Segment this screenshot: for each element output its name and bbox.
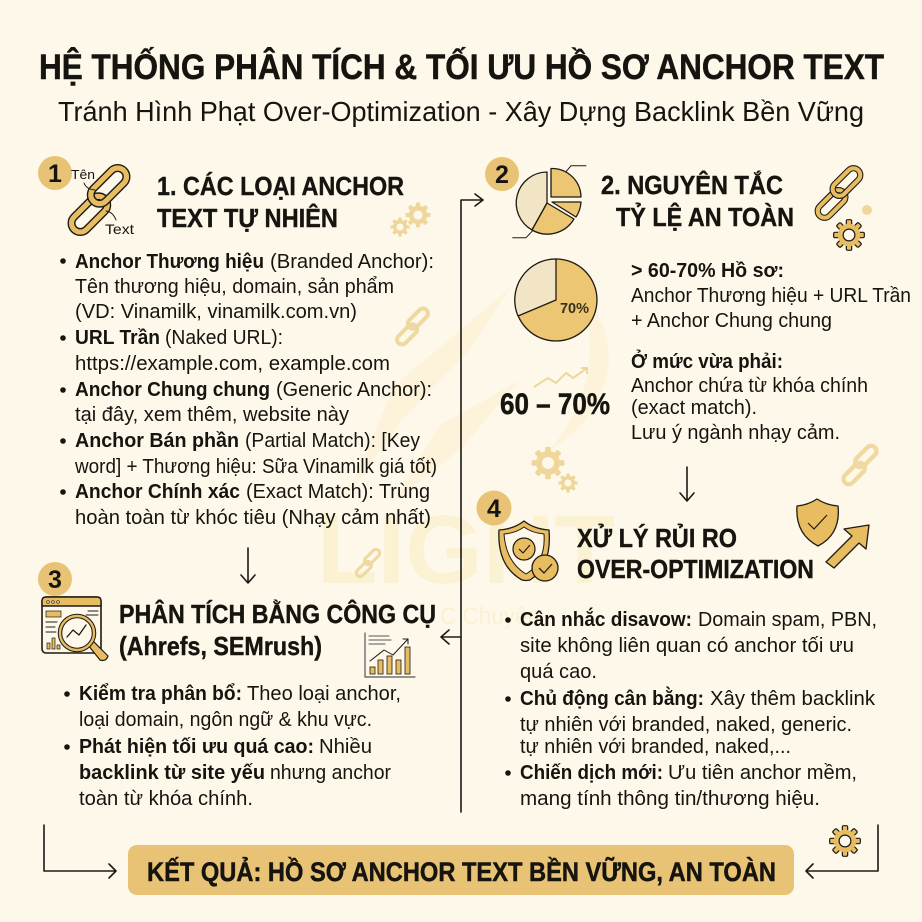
heading 2: 2. NGUYÊN TẮC xyxy=(601,170,783,200)
heading 4 xyxy=(577,522,814,584)
list: tool checks: Theo loại anchor, xyxy=(247,683,401,705)
heading 4: XỬ LÝ RỦI RO xyxy=(577,522,737,553)
icon: chain and gear xyxy=(811,165,872,250)
heading 3: PHÂN TÍCH BẰNG CÔNG CỤ xyxy=(119,599,436,629)
icon: pale chains xyxy=(353,306,881,578)
list: anchor types: https://example.com, example.com xyxy=(75,353,390,375)
badge 1: 1 xyxy=(48,160,62,188)
heading 2 xyxy=(601,170,794,232)
list: risk actions: Xây thêm backlink xyxy=(710,688,876,710)
list: anchor types: tại đây, xem thêm, website này xyxy=(75,404,349,426)
icon: exploded pie xyxy=(513,166,586,238)
result banner: KẾT QUẢ: HỒ SƠ ANCHOR TEXT BỀN VỮNG, AN TOÀN xyxy=(147,855,776,887)
icon: pale gears center xyxy=(532,447,578,493)
list: tool checks: backlink từ site yếu xyxy=(79,762,265,784)
list: risk actions: quá cao. xyxy=(520,661,597,683)
result banner xyxy=(128,845,794,895)
watermark xyxy=(317,288,615,630)
list: anchor types: Anchor Chính xác xyxy=(75,481,240,503)
list: anchor types: hoàn toàn từ khóc tiêu (Nhạy cảm nhất) xyxy=(75,507,431,529)
heading 3: (Ahrefs, SEMrush) xyxy=(119,631,322,661)
connector: central line with arrows xyxy=(441,194,483,812)
text: ratio rules xyxy=(631,260,911,444)
list: anchor types xyxy=(60,251,437,529)
list: risk actions: tự nhiên với branded, naked,... xyxy=(520,736,791,758)
list: anchor types: Anchor Bán phần xyxy=(75,430,239,452)
list: tool checks: Phát hiện tối ưu quá cao: xyxy=(79,736,314,758)
list: anchor types: URL Trần xyxy=(75,327,160,349)
arrow: section 2 to section 4 xyxy=(680,467,694,501)
panel: section 3 tools xyxy=(38,562,436,810)
list: anchor types: Anchor Chung chung xyxy=(75,379,270,401)
heading 3 xyxy=(119,599,436,661)
icon: chain with labels xyxy=(63,164,135,237)
icon: shield with checks xyxy=(499,521,558,581)
list: tool checks: Kiểm tra phân bổ: xyxy=(79,683,242,705)
heading 2: TỶ LỆ AN TOÀN xyxy=(616,202,794,232)
icon: trend arrow xyxy=(534,368,587,387)
text: ratio rules: Ở mức vừa phải: xyxy=(631,349,783,373)
list: tool checks: toàn từ khóa chính. xyxy=(79,788,253,810)
list: anchor types: (VD: Vinamilk, vinamilk.com.vn) xyxy=(75,301,357,323)
chart: 70 percent pie xyxy=(515,259,597,341)
list: risk actions: tự nhiên với branded, naked, generic. xyxy=(520,714,852,736)
chart: 70 percent pie: 70% xyxy=(560,300,589,317)
badge 1 xyxy=(38,156,72,190)
text: ratio rules: Anchor Thương hiệu + URL Trần xyxy=(631,285,911,307)
heading 1 xyxy=(157,171,404,233)
badge 4 xyxy=(476,490,512,526)
icon: bar chart xyxy=(365,633,415,677)
badge 2 xyxy=(485,157,519,191)
list: risk actions: Domain spam, PBN, xyxy=(698,609,877,631)
list: anchor types: (Branded Anchor): xyxy=(270,251,434,273)
badge 2: 2 xyxy=(495,161,509,189)
panel: section 4 risk handling xyxy=(476,490,877,810)
list: risk actions: Chủ động cân bằng: xyxy=(520,686,704,710)
icon: chain with labels: Text xyxy=(105,221,134,237)
list: anchor types: Anchor Thương hiệu xyxy=(75,251,264,273)
text: ratio rules: + Anchor Chung chung xyxy=(631,310,832,332)
list: risk actions: Ưu tiên anchor mềm, xyxy=(668,762,857,784)
list: anchor types: (Generic Anchor): xyxy=(276,379,432,401)
heading 1: TEXT TỰ NHIÊN xyxy=(157,203,338,233)
arrow: bottom left to result xyxy=(44,825,116,878)
list: risk actions xyxy=(505,607,877,810)
list: anchor types: (Partial Match): [Key xyxy=(245,430,420,452)
watermark: LIGHT xyxy=(317,495,615,604)
subtitle: Tránh Hình Phạt Over-Optimization - Xây Dựng Backlink Bền Vững xyxy=(58,96,864,127)
icon: pale gears xyxy=(390,203,430,237)
list: risk actions: Chiến dịch mới: xyxy=(520,762,663,784)
text: ratio rules: > 60-70% Hồ sơ: xyxy=(631,260,784,282)
badge 4: 4 xyxy=(487,495,501,523)
heading 1: 1. CÁC LOẠI ANCHOR xyxy=(157,171,404,201)
list: anchor types: word] + Thương hiệu: Sữa Vinamilk giá tốt) xyxy=(74,456,437,478)
list: risk actions: Cân nhắc disavow: xyxy=(520,607,692,631)
text: ratio rules: Lưu ý ngành nhạy cảm. xyxy=(631,422,840,444)
icon: chain with labels: Tên xyxy=(71,167,95,182)
list: anchor types: (Naked URL): xyxy=(165,327,283,349)
list: tool checks xyxy=(64,683,401,810)
list: anchor types: (Exact Match): Trùng xyxy=(246,481,430,503)
list: risk actions: site không liên quan có anchor tối ưu xyxy=(520,635,854,657)
watermark: C Chuyên xyxy=(440,603,540,630)
text: ratio rules: (exact match). xyxy=(631,397,757,419)
list: tool checks: loại domain, ngôn ngữ & khu vực. xyxy=(79,709,372,731)
icon: browser analytics magnifier xyxy=(42,597,108,660)
badge 3 xyxy=(38,562,72,596)
list: risk actions: mang tính thông tin/thương hiệu. xyxy=(520,788,820,810)
icon: gear bottom right xyxy=(830,826,860,856)
icon: shield and up arrow xyxy=(797,499,869,568)
stat: 60 to 70 percent: 60 – 70% xyxy=(500,388,610,421)
text: ratio rules: Anchor chứa từ khóa chính xyxy=(631,375,868,397)
list: tool checks: nhưng anchor xyxy=(270,762,391,784)
list: tool checks: Nhiều xyxy=(319,736,372,758)
badge 3: 3 xyxy=(48,566,62,594)
arrow: section 1 to section 3 xyxy=(241,548,255,583)
heading 4: OVER-OPTIMIZATION xyxy=(577,554,814,584)
panel: section 1 anchor types xyxy=(38,156,437,529)
arrow: bottom right to result xyxy=(806,825,878,878)
list: anchor types: Tên thương hiệu, domain, sản phẩm xyxy=(75,276,394,298)
panel: section 2 safe ratio xyxy=(485,157,911,444)
